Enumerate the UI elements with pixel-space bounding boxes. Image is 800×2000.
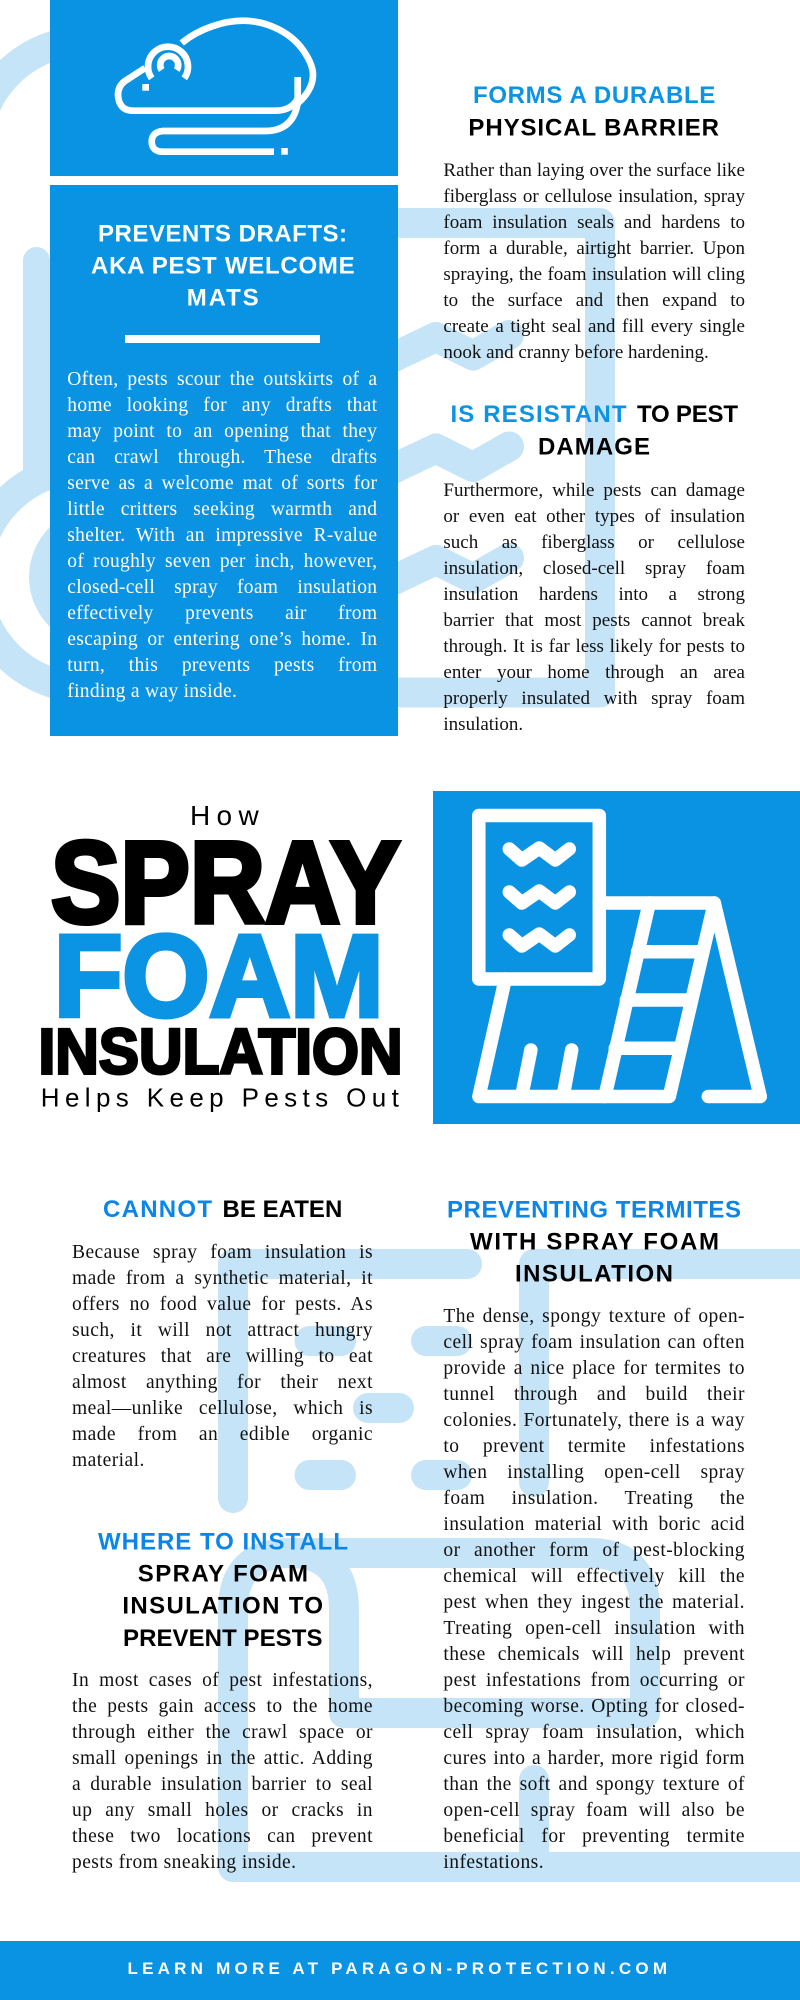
text: cannot be eaten body: Because spray foam insulation is	[72, 1242, 373, 1263]
title	[38, 800, 402, 1113]
text: prevents drafts body: shelter. With an impressive R-value	[67, 524, 377, 546]
text: forms a durable body: to the surface and then expand to	[443, 290, 745, 311]
text: preventing termites body: foam insulation. Treating the	[443, 1488, 745, 1509]
text: cannot be eaten body: almost anything for their next	[72, 1372, 373, 1393]
text: prevents drafts body: escaping or entering one’s home. In	[67, 628, 377, 650]
panel: house and ladder icon	[433, 791, 800, 1124]
heading: preventing termites: WITH SPRAY FOAM	[470, 1228, 719, 1255]
text: where to install body: small openings in the attic. Adding	[72, 1748, 373, 1769]
text: cannot be eaten body	[72, 1242, 373, 1471]
text: cannot be eaten body: meal—unlike cellulose, which is	[72, 1398, 373, 1419]
heading: is resistant to pest damage: TO PEST	[637, 401, 738, 428]
text: preventing termites body: infestations.	[443, 1852, 544, 1873]
heading: prevents drafts	[91, 221, 355, 312]
text: preventing termites body: insulation material with boric acid	[443, 1514, 745, 1535]
text: forms a durable body: foam insulation seals and hardens to	[443, 212, 745, 233]
heading: where to install: SPRAY FOAM	[138, 1560, 308, 1588]
text: forms a durable body: fiberglass or cellulose insulation, spray	[443, 186, 745, 207]
text: where to install body: a durable insulation barrier to seal	[72, 1774, 373, 1795]
text: where to install body: these two locations can prevent	[72, 1826, 373, 1847]
text: where to install body	[72, 1670, 373, 1873]
heading: preventing termites	[447, 1196, 741, 1288]
text: forms a durable body: form a durable, airtight barrier. Upon	[443, 238, 745, 259]
text: is resistant body	[443, 480, 745, 735]
title: INSULATION	[38, 1016, 402, 1088]
footer	[0, 1941, 800, 2000]
heading: prevents drafts: PREVENTS DRAFTS:	[98, 221, 347, 248]
heading: forms a durable physical barrier: FORMS A DURABLE	[473, 82, 715, 109]
text: is resistant body: insulation.	[443, 714, 523, 735]
text: preventing termites body: pest infestations from occurring or	[443, 1670, 745, 1691]
text: cannot be eaten body: made from a synthetic material, it	[72, 1268, 373, 1289]
heading: cannot be eaten: BE EATEN	[222, 1196, 342, 1223]
text: is resistant body: enter your home through an area	[443, 662, 745, 683]
text: forms a durable body: nook and cranny before hardening.	[443, 342, 709, 363]
text: is resistant body: Furthermore, while pests can damage	[443, 480, 745, 501]
heading: preventing termites: INSULATION	[515, 1261, 673, 1288]
heading: where to install	[98, 1528, 348, 1652]
heading: forms a durable physical barrier	[468, 82, 719, 141]
text: forms a durable body: spraying, the foam insulation will cling	[443, 264, 745, 285]
text: prevents drafts body: closed-cell spray foam insulation	[67, 576, 377, 598]
text: preventing termites body	[443, 1306, 745, 1873]
text: preventing termites body: The dense, spongy texture of open-	[443, 1306, 745, 1327]
text: cannot be eaten body: made from an edible organic	[72, 1424, 373, 1445]
panel: prevents drafts	[50, 185, 398, 736]
text: preventing termites body: beneficial for preventing termite	[443, 1826, 745, 1847]
text: preventing termites body: Treating open-cell insulation with	[443, 1618, 745, 1639]
heading: cannot be eaten	[103, 1196, 342, 1223]
title: SPRAY	[51, 818, 400, 948]
heading: prevents drafts: MATS	[187, 285, 259, 312]
text: where to install body: pests from sneaking inside.	[72, 1852, 296, 1873]
text: preventing termites body: becoming worse. Opting for closed-	[443, 1696, 745, 1717]
text: prevents drafts body: finding a way inside.	[67, 680, 237, 702]
heading: where to install: INSULATION TO	[122, 1593, 323, 1620]
text: preventing termites body: provide a nice place for termites to	[443, 1358, 745, 1379]
text: preventing termites body: or another form of pest-blocking	[443, 1540, 745, 1561]
heading: where to install: WHERE TO INSTALL	[98, 1528, 348, 1555]
text: is resistant body: barrier that most pests cannot break	[443, 610, 745, 631]
text: prevents drafts body: may point to an opening that they	[67, 420, 377, 442]
text: prevents drafts body: of roughly seven per inch, however,	[67, 550, 377, 572]
heading: is resistant to pest damage: IS RESISTANT	[450, 401, 627, 428]
text: preventing termites body: to prevent termite infestations	[443, 1436, 745, 1457]
text: where to install body: the pests gain access to the home	[72, 1696, 373, 1717]
heading: is resistant to pest damage	[450, 401, 738, 460]
text: is resistant body: insulation hardens into a strong	[443, 584, 745, 605]
text: preventing termites body: colonies. Fortunately, there is a way	[443, 1410, 745, 1431]
text: where to install body: up any small holes or cracks in	[72, 1800, 373, 1821]
text: is resistant body: insulation, closed-cell spray foam	[443, 558, 745, 579]
text: cannot be eaten body: offers no food value for pests. As	[72, 1294, 373, 1315]
text: forms a durable body	[443, 160, 745, 363]
heading: is resistant to pest damage: DAMAGE	[538, 434, 650, 460]
divider bar	[125, 335, 320, 343]
heading: prevents drafts: AKA PEST WELCOME	[91, 253, 355, 280]
text: prevents drafts body: little critters seeking warmth and	[67, 498, 377, 520]
text: preventing termites body: cell spray foam insulation, which	[443, 1722, 745, 1743]
heading: cannot be eaten: CANNOT	[103, 1196, 212, 1223]
text: cannot be eaten body: material.	[72, 1450, 145, 1471]
text: prevents drafts body: Often, pests scour the outskirts of a	[67, 368, 377, 390]
text: where to install body: In most cases of pest infestations,	[72, 1670, 373, 1691]
heading: forms a durable physical barrier: PHYSICAL BARRIER	[468, 114, 719, 141]
text: preventing termites body: chemical will effectively kill the	[443, 1566, 745, 1587]
text: cannot be eaten body: creatures that are willing to eat	[72, 1346, 373, 1367]
text: prevents drafts body	[67, 368, 377, 702]
footer text: LEARN MORE AT PARAGON-PROTECTION.COM	[128, 1959, 667, 1978]
icon: house with ladder	[472, 808, 768, 1104]
text: is resistant body: such as fiberglass or cellulose	[443, 532, 745, 553]
text: cannot be eaten body: such, it will not attract hungry	[72, 1320, 373, 1341]
text: prevents drafts body: can crawl through. These drafts	[67, 446, 377, 468]
text: preventing termites body: tunnel through and build their	[443, 1384, 745, 1405]
text: prevents drafts body: effectively prevents air from	[67, 602, 377, 624]
text: where to install body: through either the crawl space or	[72, 1722, 373, 1743]
text: preventing termites body: pest when they ingest the material.	[443, 1592, 745, 1613]
text: preventing termites body: than the soft and spongy texture of	[443, 1774, 745, 1795]
text: preventing termites body: open-cell spray foam will also be	[443, 1800, 745, 1821]
title: Helps Keep Pests Out	[41, 1083, 400, 1113]
icon: mouse	[114, 17, 316, 155]
title: FOAM	[54, 911, 384, 1041]
text: forms a durable body: Rather than laying over the surface like	[443, 160, 745, 181]
text: prevents drafts body: home looking for any drafts that	[67, 394, 377, 416]
title: How	[190, 800, 259, 831]
text: preventing termites body: when installing open-cell spray	[443, 1462, 745, 1483]
text: is resistant body: properly insulated with spray foam	[443, 688, 745, 709]
text: prevents drafts body: turn, this prevents pests from	[67, 654, 377, 676]
text: preventing termites body: cell spray foam insulation can often	[443, 1332, 745, 1353]
text: prevents drafts body: serve as a welcome mat of sorts for	[67, 472, 377, 494]
heading: preventing termites: PREVENTING TERMITES	[447, 1196, 741, 1223]
text: forms a durable body: create a tight seal and fill every single	[443, 316, 745, 337]
panel: mouse icon	[50, 0, 398, 176]
heading: where to install: PREVENT PESTS	[123, 1625, 322, 1652]
text: preventing termites body: these chemicals will help prevent	[443, 1644, 745, 1665]
text: is resistant body: or even eat other types of insulation	[443, 506, 745, 527]
text: preventing termites body: cures into a harder, more rigid form	[443, 1748, 745, 1769]
text: is resistant body: through. It is far less likely for pests to	[443, 636, 745, 657]
